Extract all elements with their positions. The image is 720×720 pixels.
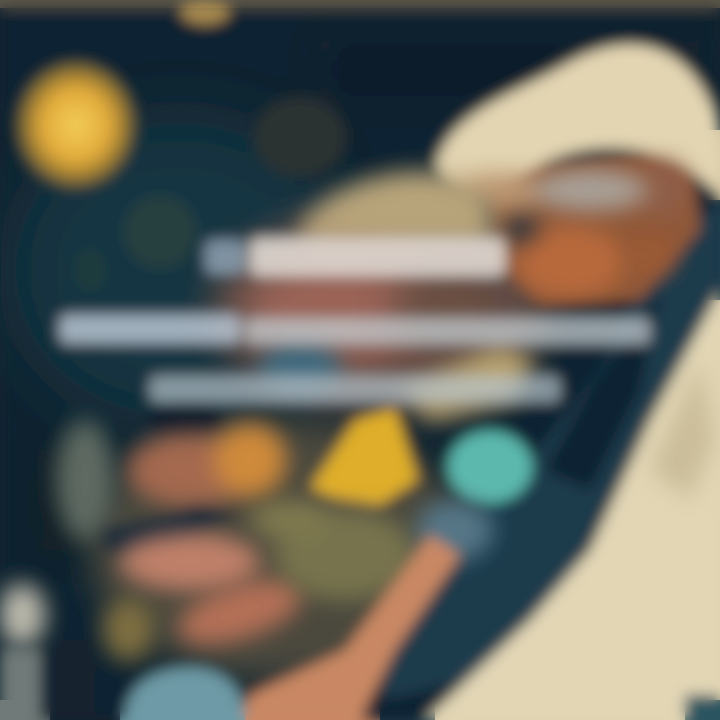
muddy base behind figures bbox=[90, 210, 550, 680]
panel: child face and hands bbox=[57, 420, 309, 660]
text block: title (blurred, illegible) bbox=[60, 238, 650, 402]
panel: dark jacket of elder figure bbox=[375, 200, 720, 700]
panel: pointing hand and arm bbox=[240, 535, 460, 720]
icon: teal circle bbox=[448, 431, 532, 503]
dim background lights bbox=[74, 97, 346, 292]
icon: yellow object bbox=[310, 408, 418, 505]
panel: central figure hair and face bbox=[245, 173, 500, 365]
top lamp bbox=[181, 0, 229, 24]
icon: glasses bbox=[532, 170, 648, 210]
panel: elder white hair bbox=[436, 45, 720, 220]
panel: green and olive foliage bbox=[250, 500, 493, 600]
icon: orange object bbox=[214, 424, 286, 496]
icon: yellow lamp glow bbox=[16, 61, 136, 189]
panel: cream garment bbox=[425, 290, 720, 720]
panel: centre shirt and lower detail bbox=[147, 340, 535, 436]
panel: lower left shapes bbox=[0, 585, 245, 720]
panel: elder face bbox=[490, 150, 700, 305]
